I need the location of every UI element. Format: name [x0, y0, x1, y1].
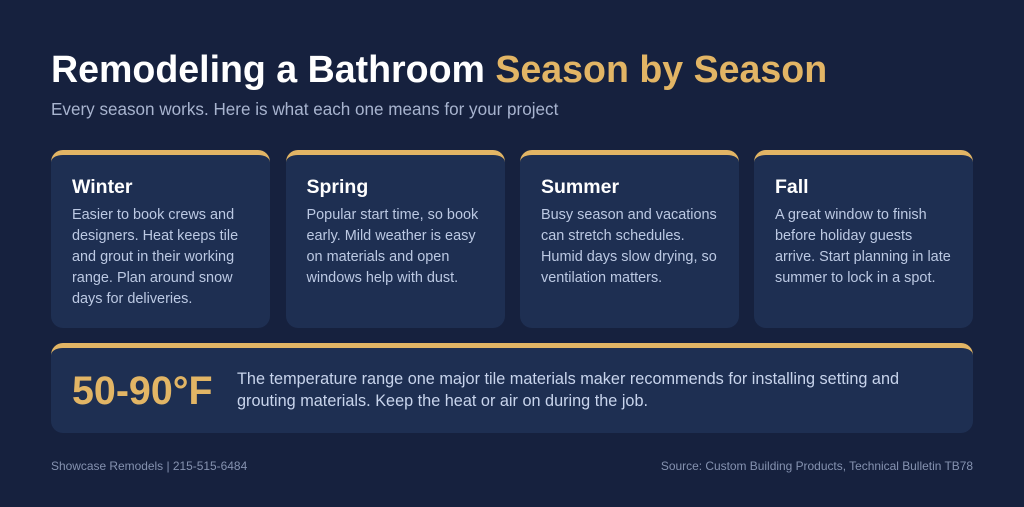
stat description: The temperature range one major tile materials maker recommends for installing setting and	[237, 370, 899, 388]
text: summer	[541, 207, 717, 286]
text: spring: Popular start time, so book	[306, 207, 478, 223]
text: winter: days for deliveries.	[72, 291, 192, 307]
text: fall	[775, 207, 951, 286]
title: Remodeling a Bathroom Season by Season	[51, 48, 827, 90]
stat number: 50-90°F	[72, 369, 213, 413]
footer: source: Source: Custom Building Products, Technical Bulletin TB78	[661, 459, 973, 473]
text: winter: Easier to book crews and	[72, 207, 234, 223]
text: summer: Humid days slow drying, so	[541, 249, 717, 265]
text: spring	[306, 207, 478, 286]
panel: temperature callout	[51, 343, 973, 433]
text: winter: range. Plan around snow	[72, 270, 233, 286]
text: summer: ventilation matters.	[541, 270, 662, 286]
text: fall: A great window to finish	[775, 207, 927, 223]
heading: summer: Summer	[541, 176, 619, 198]
heading: winter: Winter	[72, 176, 132, 198]
text: spring: early. Mild weather is easy	[306, 228, 476, 244]
text: fall: before holiday guests	[775, 228, 912, 244]
panel: summer	[520, 150, 739, 328]
panel: winter	[51, 150, 270, 328]
panel: spring	[286, 150, 504, 328]
text: spring: windows help with dust.	[306, 270, 458, 286]
text: summer: Busy season and vacations	[541, 207, 717, 223]
heading: fall: Fall	[775, 176, 809, 198]
heading: spring: Spring	[306, 176, 368, 198]
text: winter: designers. Heat keeps tile	[72, 228, 238, 244]
text: fall: summer to lock in a spot.	[775, 270, 935, 286]
panel: fall	[754, 150, 973, 328]
subtitle: Every season works. Here is what each one means for your project	[51, 100, 558, 118]
stat description	[237, 370, 899, 410]
stat description: grouting materials. Keep the heat or air on during the job.	[237, 392, 648, 410]
text: summer: can stretch schedules.	[541, 228, 685, 244]
text: winter: and grout in their working	[72, 249, 234, 265]
text: fall: arrive. Start planning in late	[775, 249, 951, 265]
text: spring: on materials and open	[306, 249, 449, 265]
text: winter	[72, 207, 238, 307]
footer: contact: Showcase Remodels | 215-515-6484	[51, 459, 247, 473]
